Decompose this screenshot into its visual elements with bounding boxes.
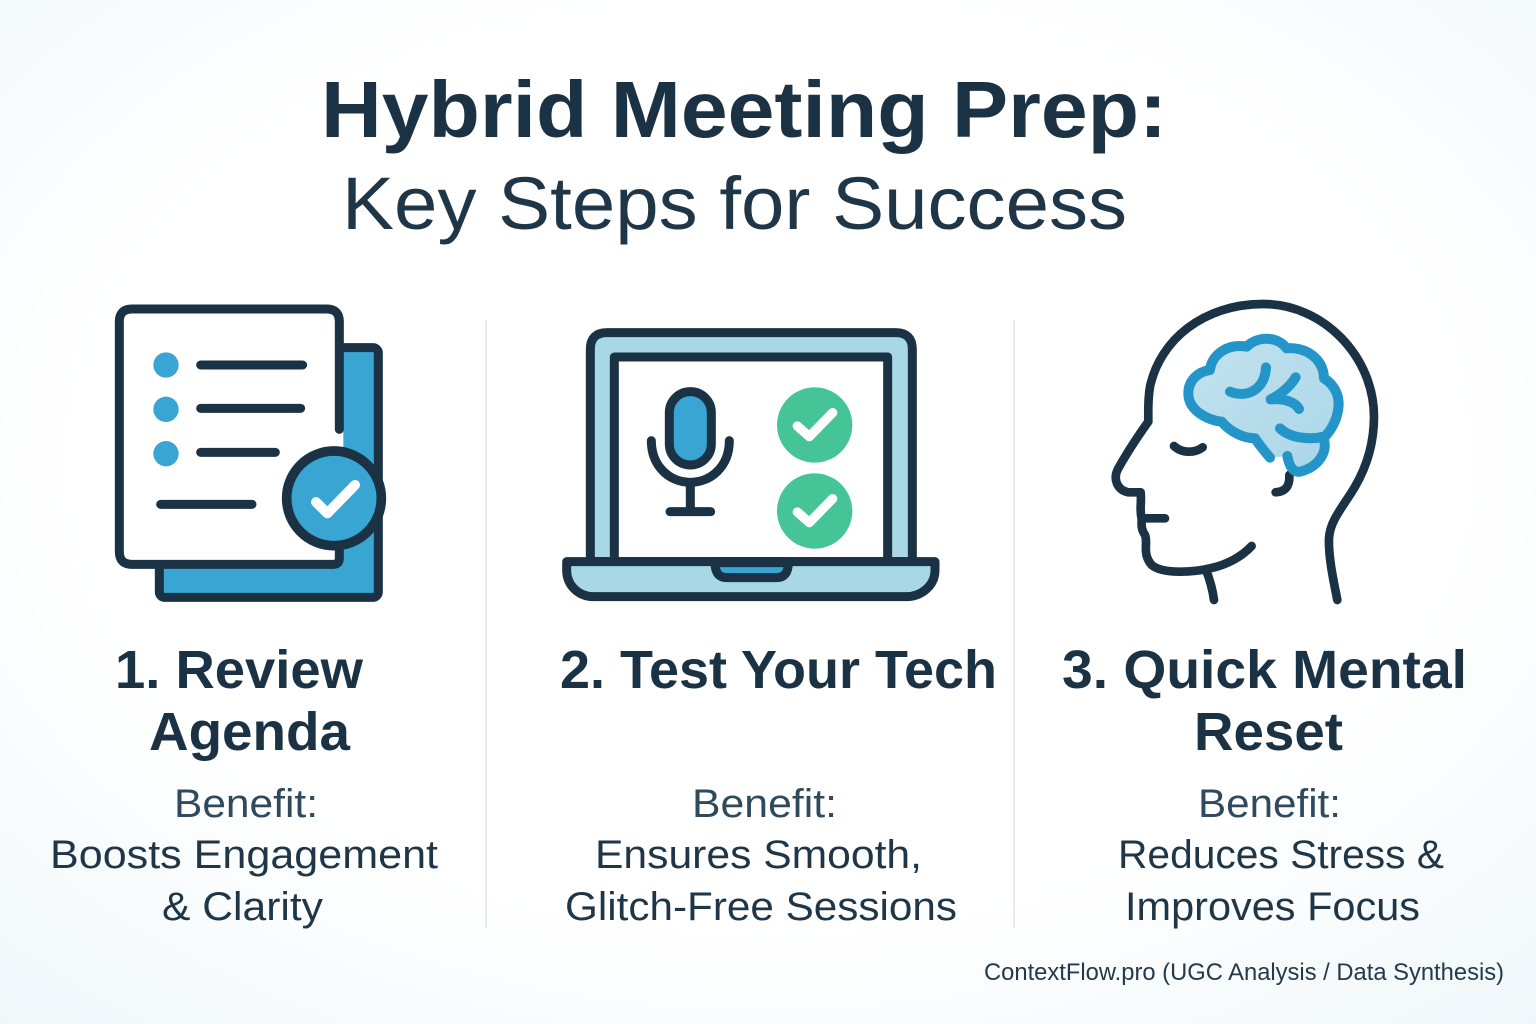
text: step 1 benefit: Benefit:	[174, 782, 318, 826]
text: step 2 benefit: Ensures Smooth,	[595, 833, 922, 877]
text: step 1 benefit: & Clarity	[162, 885, 323, 929]
text: step 3 benefit: Reduces Stress &	[1118, 833, 1444, 877]
heading: step 3: Reset	[1194, 702, 1343, 762]
text: step 1 benefit	[50, 782, 438, 929]
heading: step 1: 1. Review	[115, 640, 364, 700]
panel: step 1 review agenda	[50, 309, 438, 929]
heading: step 1: Agenda	[149, 702, 351, 762]
text: step 3 benefit: Improves Focus	[1125, 885, 1420, 929]
heading: step 3	[1062, 640, 1467, 762]
source credit: ContextFlow.pro (UGC Analysis / Data Synthesis)	[984, 959, 1504, 986]
text: step 2 benefit: Glitch-Free Sessions	[565, 885, 957, 929]
panel: step 3 quick mental reset	[1062, 304, 1467, 929]
title: Key Steps for Success	[342, 162, 1127, 245]
panel: step 2 test your tech	[560, 333, 997, 929]
text: step 3 benefit	[1118, 782, 1444, 929]
text: step 2 benefit	[565, 782, 957, 929]
text: step 2 benefit: Benefit:	[692, 782, 837, 826]
icon: head with brain	[1116, 304, 1374, 600]
icon: laptop with microphone and checks	[567, 333, 935, 597]
heading: step 1	[115, 640, 364, 762]
icon: agenda document with check	[119, 309, 381, 597]
title	[321, 65, 1167, 245]
heading: step 2: 2. Test Your Tech	[560, 640, 997, 700]
text: step 3 benefit: Benefit:	[1198, 782, 1341, 826]
heading: step 3: 3. Quick Mental	[1062, 640, 1467, 700]
text: step 1 benefit: Boosts Engagement	[50, 833, 438, 877]
title: Hybrid Meeting Prep:	[321, 65, 1167, 154]
